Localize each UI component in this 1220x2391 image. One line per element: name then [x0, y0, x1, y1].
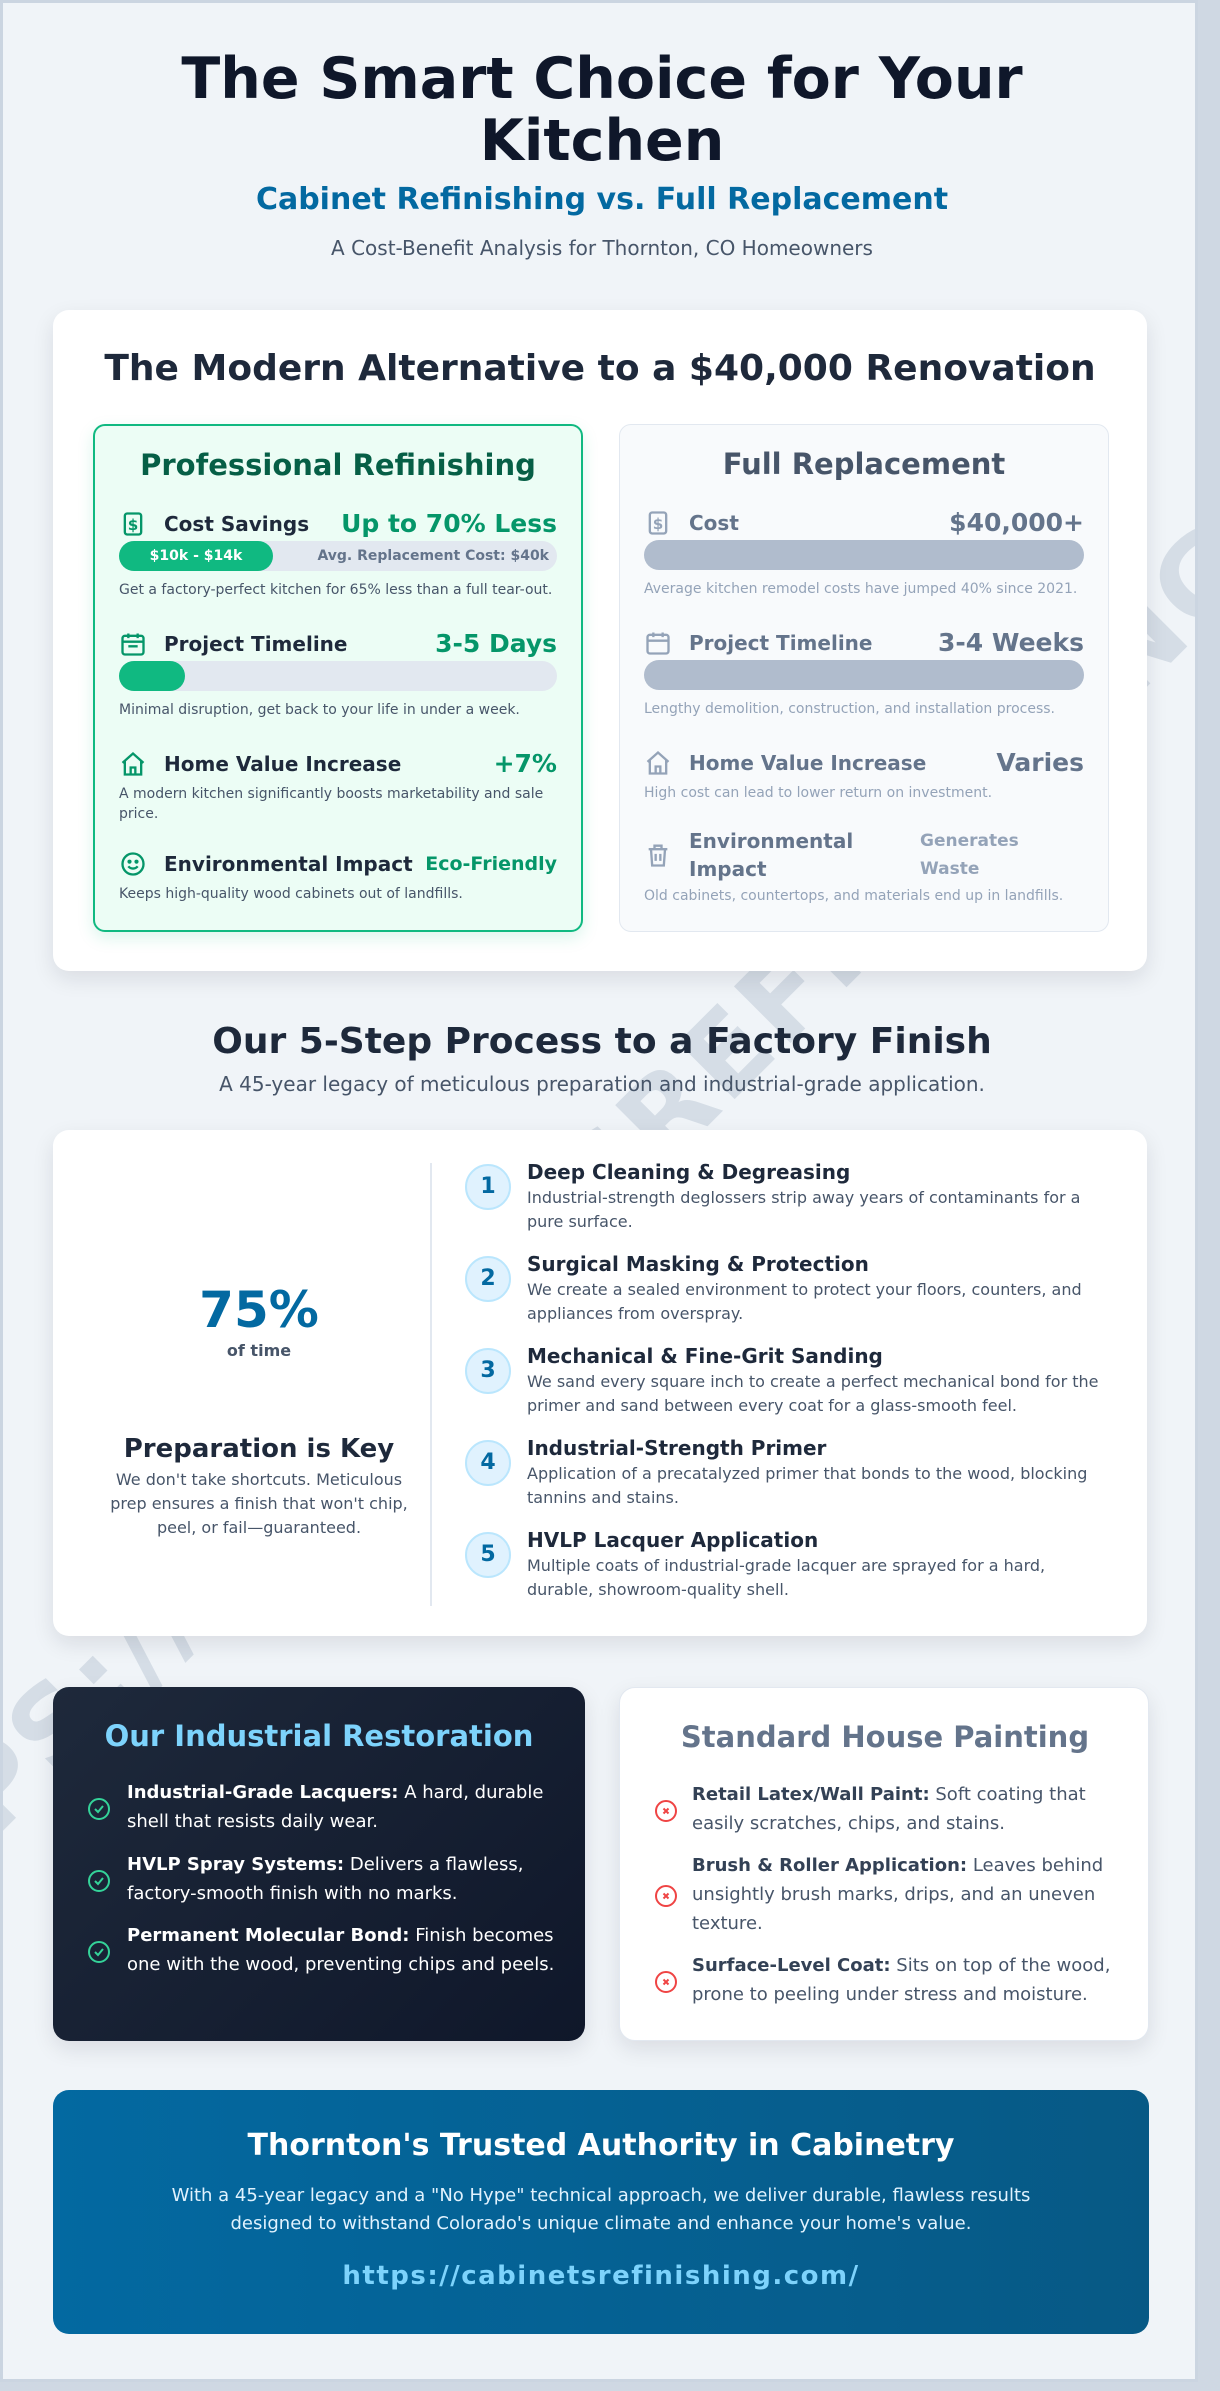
panel: professional refinishing [93, 424, 583, 932]
panel: full replacement: Average kitchen remodel costs have jumped 40% since 2021. [644, 581, 1077, 597]
row: environmental: Eco-Friendly [425, 853, 557, 875]
text: With a 45-year legacy and a "No Hype" technical approach, we deliver durable, flawless results designed to withstand Colorado's unique climate and enhance your home's value. [172, 2185, 1030, 2234]
row: environmental: Waste [920, 859, 979, 879]
heading: Standard House Painting [681, 1720, 1089, 1754]
stat: 75% of time: of time [227, 1341, 291, 1360]
row: timeline [646, 628, 1084, 657]
text: preparation is key [110, 1434, 408, 1537]
item 1: Retail Latex/Wall Paint: Soft coating that easily scratches, chips, and stains. [692, 1784, 1086, 1834]
list: steps: 1 [480, 1174, 496, 1199]
panel: professional refinishing: Keeps high-quality wood cabinets out of landfills. [119, 886, 463, 902]
list: steps: Deep Cleaning & Degreasing [527, 1160, 850, 1184]
row: cost: Cost [689, 511, 739, 535]
item 2: Brush & Roller Application: Leaves behind unsightly brush marks, drips, and an uneven texture. [692, 1855, 1103, 1934]
list: steps: 2 [480, 1266, 496, 1291]
title [181, 46, 1023, 174]
panel: full replacement: High cost can lead to lower return on investment. [644, 785, 992, 801]
row: environmental: Environmental [689, 829, 853, 853]
row: home value [122, 749, 557, 778]
row: home value: Home Value Increase [164, 752, 401, 776]
heading: Our Industrial Restoration [105, 1719, 533, 1753]
row: home value [646, 748, 1084, 777]
heading: Thornton's Trusted Authority in Cabinetry [248, 2128, 954, 2163]
list: steps [465, 1160, 1099, 1599]
row: home value: Home Value Increase [689, 751, 926, 775]
panel: footer CTA [53, 2090, 1149, 2334]
bar: cost: $10k - $14k [150, 548, 242, 564]
list: steps: We sand every square inch to create a perfect mechanical bond for the primer and sand between every coat for a glass-smooth feel. [527, 1372, 1099, 1415]
heading: 5-step process: Our 5-Step Process to a Factory Finish [212, 1021, 992, 1062]
row: environmental [121, 852, 557, 876]
panel: professional refinishing: Get a factory-perfect kitchen for 65% less than a full tear-out. [119, 582, 552, 598]
heading: Professional Refinishing [140, 448, 536, 482]
row: environmental [648, 829, 1019, 881]
panel: industrial restoration [53, 1687, 585, 2041]
bar: cost [119, 541, 557, 571]
item 2: HVLP Spray Systems: Delivers a flawless, factory-smooth finish with no marks. [127, 1854, 523, 1904]
panel: standard house painting [619, 1687, 1149, 2041]
heading: Full Replacement [723, 447, 1005, 481]
step 3 [465, 1344, 1099, 1415]
row: cost savings [124, 509, 557, 538]
row: environmental: Environmental Impact [164, 852, 413, 876]
panel: professional refinishing: Minimal disruption, get back to your life in under a week. [119, 702, 520, 718]
subtitle: Cabinet Refinishing vs. Full Replacement [256, 182, 948, 217]
bar: cost: Avg. Replacement Cost: $40k [317, 548, 549, 564]
row: cost savings: $ [128, 516, 138, 534]
heading: modern alternative: The Modern Alternative to a $40,000 Renovation [104, 348, 1096, 389]
row: environmental: Impact [689, 857, 767, 881]
list: steps: Application of a precatalyzed primer that bonds to the wood, blocking tannins and stains. [527, 1464, 1087, 1507]
row: cost: $ [653, 515, 663, 533]
row: cost savings: Up to 70% Less [341, 509, 557, 538]
row: environmental: Generates [920, 831, 1019, 851]
list: steps: HVLP Lacquer Application [527, 1528, 818, 1552]
row: cost [648, 508, 1084, 537]
step 5 [465, 1528, 1045, 1599]
row: timeline [121, 629, 557, 658]
panel: full replacement [619, 424, 1109, 932]
url: https://cabinetsrefinishing.com/ [342, 2261, 860, 2291]
step 4 [465, 1436, 1087, 1507]
text: preparation is key: Preparation is Key [124, 1434, 394, 1464]
title: Kitchen [480, 108, 724, 174]
panel: process [53, 1130, 1147, 1636]
item 3: Permanent Molecular Bond: Finish becomes one with the wood, preventing chips and peels. [127, 1925, 554, 1975]
row: home value: +7% [494, 749, 557, 778]
list: steps: Surgical Masking & Protection [527, 1252, 869, 1276]
panel: full replacement: Old cabinets, countertops, and materials end up in landfills. [644, 888, 1063, 904]
list: steps: 3 [480, 1358, 496, 1383]
list: steps: 4 [480, 1450, 496, 1475]
list: steps: We create a sealed environment to protect your floors, counters, and appliances from overspray. [527, 1280, 1082, 1323]
list: steps: Mechanical & Fine-Grit Sanding [527, 1344, 883, 1368]
list: steps: Multiple coats of industrial-grade lacquer are sprayed for a hard, durable, showroom-quality shell. [527, 1556, 1045, 1599]
row: home value: Varies [996, 748, 1084, 777]
title: The Smart Choice for Your [181, 46, 1023, 112]
list: steps: 5 [480, 1542, 496, 1567]
stat: 75% of time: 75% [199, 1281, 319, 1339]
item 3: Surface-Level Coat: Sits on top of the wood, prone to peeling under stress and moisture. [692, 1955, 1110, 2005]
row: timeline: Project Timeline [689, 631, 872, 655]
tagline: A Cost-Benefit Analysis for Thornton, CO Homeowners [331, 236, 873, 260]
panel: full replacement: Lengthy demolition, construction, and installation process. [644, 701, 1055, 717]
row: cost savings: Cost Savings [164, 512, 309, 536]
list: steps: Industrial-strength deglossers strip away years of contaminants for a pure surface. [527, 1188, 1080, 1231]
row: cost: $40,000+ [949, 508, 1084, 537]
list: steps: Industrial-Strength Primer [527, 1436, 826, 1460]
panel: comparison [53, 310, 1147, 971]
panel: professional refinishing: A modern kitchen significantly boosts marketability and sale price. [119, 786, 543, 822]
row: timeline: 3-5 Days [435, 629, 557, 658]
row: timeline: Project Timeline [164, 632, 347, 656]
step 2 [465, 1252, 1082, 1323]
text: process subtitle: A 45-year legacy of meticulous preparation and industrial-grade application. [219, 1072, 985, 1096]
text: preparation is key: We don't take shortcuts. Meticulous prep ensures a finish that won't chip, peel, or fail—guaranteed. [110, 1470, 408, 1537]
step 1 [465, 1160, 1080, 1231]
row: timeline: 3-4 Weeks [938, 628, 1084, 657]
item 1: Industrial-Grade Lacquers: A hard, durable shell that resists daily wear. [127, 1782, 543, 1832]
bar: timeline [119, 661, 557, 691]
